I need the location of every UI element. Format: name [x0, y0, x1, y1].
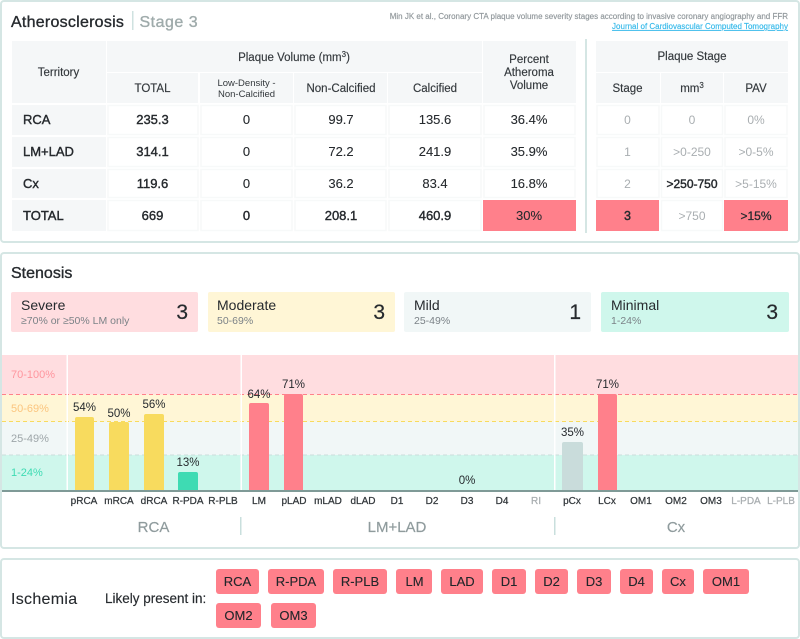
row: LM+LAD: 0 — [243, 144, 250, 159]
row: RCA — [12, 105, 575, 135]
row: RCA: 99.7 — [328, 112, 354, 127]
row: RCA: 235.3 — [136, 112, 169, 127]
row: TOTAL: 460.9 — [419, 208, 451, 223]
row: LM+LAD: 35.9% — [511, 144, 548, 159]
table: plaque volume: ) — [346, 52, 350, 64]
heading: atherosclerosis stage — [11, 11, 198, 31]
segment labels: dRCA — [141, 496, 168, 507]
card: severe: 3 — [176, 301, 188, 324]
segment labels: mLAD — [314, 496, 342, 507]
bar chart: stenosis by segment — [2, 355, 798, 536]
segment labels — [71, 496, 795, 507]
bar values: 56% — [142, 399, 166, 411]
heading: atherosclerosis stage: Stage 3 — [140, 14, 198, 31]
bar values: 64% — [247, 389, 271, 401]
segment labels: RI — [531, 496, 541, 507]
table: plaque volume: Non-Calcified — [218, 89, 275, 100]
chips: affected territories: R-PLB — [341, 574, 379, 589]
table: plaque volume: Calcified — [413, 83, 457, 95]
severity bands: 50-69% — [11, 403, 49, 415]
row: Cx: 83.4 — [422, 176, 448, 191]
table: plaque volume: Territory — [38, 67, 80, 79]
table: plaque volume: Low-Density - — [217, 78, 276, 89]
table: plaque stage: 1 — [624, 145, 631, 159]
row: Cx: 0 — [243, 176, 250, 191]
segment labels: R-PDA — [172, 496, 204, 507]
card: moderate: 3 — [373, 301, 385, 324]
row: TOTAL: 30% — [516, 208, 542, 223]
segment labels: OM2 — [665, 496, 687, 507]
segment labels: L-PDA — [731, 496, 761, 507]
bars — [75, 394, 617, 490]
table: plaque stage: 0 — [689, 113, 696, 127]
severity bands: 70-100% — [11, 369, 55, 381]
bar values: 54% — [73, 402, 96, 414]
row: LM+LAD: 241.9 — [419, 144, 451, 159]
segment labels: mRCA — [104, 496, 134, 507]
table: plaque volume: Percent — [509, 54, 550, 66]
row: TOTAL: 0 — [243, 208, 250, 223]
bar values: 13% — [176, 457, 200, 469]
citation: Min JK et al., Coronary CTA plaque volume severity stages according to invasive coronary angiography and FFR — [390, 12, 788, 21]
territory labels: LM+LAD — [368, 519, 427, 536]
row: Cx: Cx — [23, 176, 39, 191]
table: plaque stage: Plaque Stage — [657, 51, 727, 63]
territory labels — [138, 517, 686, 536]
segment labels: D4 — [496, 496, 509, 507]
severity bands: 1-24% — [11, 467, 43, 479]
row: Cx — [12, 169, 575, 198]
row: TOTAL: TOTAL — [23, 208, 64, 223]
chips: affected territories: LM — [405, 574, 424, 589]
table: plaque stage: 2 — [624, 177, 631, 191]
row: Cx: 16.8% — [511, 176, 548, 191]
row: RCA: 36.4% — [511, 112, 548, 127]
table: plaque volume: Plaque Volume (mm — [238, 52, 342, 64]
row: RCA: 0 — [243, 112, 250, 127]
table: plaque stage: 3 — [624, 209, 631, 223]
card: severe — [11, 292, 198, 332]
bar values: 35% — [561, 427, 584, 439]
segment labels: R-PLB — [208, 496, 238, 507]
card: moderate: Moderate — [217, 297, 276, 313]
chips: affected territories: D2 — [543, 574, 560, 589]
row: TOTAL: 208.1 — [325, 208, 357, 223]
table: plaque volume — [12, 41, 576, 231]
chips: affected territories: OM3 — [279, 608, 308, 623]
segment labels: LM — [252, 496, 266, 507]
table: plaque stage: >750 — [678, 209, 706, 223]
row: LM+LAD: 314.1 — [136, 144, 169, 159]
chips: affected territories: RCA — [224, 574, 252, 589]
card: severe: Severe — [21, 297, 66, 313]
row: LM+LAD: 72.2 — [328, 144, 354, 159]
heading: stenosis: Stenosis — [11, 265, 72, 282]
row: Cx: 36.2 — [328, 176, 354, 191]
table: plaque stage: >0-250 — [673, 145, 711, 159]
table: plaque volume: 3 — [342, 50, 347, 59]
chips: affected territories: Cx — [670, 574, 686, 589]
bar values: 71% — [282, 379, 305, 391]
chips: affected territories: D3 — [586, 574, 602, 589]
chips: affected territories — [216, 569, 749, 628]
table: plaque stage — [596, 41, 788, 231]
row: LM+LAD: LM+LAD — [23, 144, 74, 159]
panel: ischemia — [1, 559, 799, 638]
bar values: 0% — [459, 475, 475, 487]
row: RCA: RCA — [23, 112, 51, 127]
segment labels: OM3 — [700, 496, 722, 507]
row: Cx: 119.6 — [137, 176, 168, 191]
territory labels: Cx — [667, 519, 686, 536]
row: RCA: 135.6 — [419, 112, 451, 127]
segment labels: pLAD — [281, 496, 307, 507]
segment labels: dLAD — [350, 496, 376, 507]
table: plaque stage: >5-15% — [735, 177, 777, 191]
citation: Journal of Cardiovascular Computed Tomography — [612, 22, 788, 31]
territory labels: RCA — [138, 519, 169, 536]
segment labels: OM1 — [630, 496, 652, 507]
card: mild: Mild — [414, 297, 440, 313]
table: plaque stage: 0% — [747, 113, 765, 127]
table: plaque stage: mm — [680, 83, 699, 95]
citation — [390, 12, 788, 31]
table: plaque stage: Stage — [612, 83, 643, 95]
card: minimal: 1-24% — [611, 315, 641, 327]
bar values: 50% — [107, 408, 131, 420]
bar values: 71% — [596, 379, 619, 391]
table: plaque volume: TOTAL — [134, 83, 171, 95]
table: plaque stage: >250-750 — [666, 177, 718, 191]
row: TOTAL — [12, 200, 576, 231]
table: plaque stage: >15% — [740, 209, 772, 223]
table: plaque volume: Non-Calcified — [306, 83, 376, 95]
card: moderate: 50-69% — [217, 315, 253, 327]
segment labels: pCx — [563, 496, 581, 507]
table: plaque stage: 3 — [699, 81, 704, 90]
chips: affected territories: OM2 — [224, 608, 253, 623]
segment labels: D3 — [461, 496, 474, 507]
segment labels: pRCA — [71, 496, 98, 507]
card: mild — [404, 292, 591, 332]
chips: affected territories: D1 — [501, 574, 517, 589]
segment labels: D1 — [391, 496, 404, 507]
card: mild: 1 — [569, 301, 581, 324]
heading: atherosclerosis stage: Atherosclerosis — [11, 14, 124, 31]
card: severe: ≥70% or ≥50% LM only — [21, 315, 130, 327]
card: mild: 25-49% — [414, 315, 450, 327]
segment labels: LCx — [598, 496, 616, 507]
chips: affected territories: OM1 — [712, 574, 740, 589]
card: minimal — [601, 292, 789, 332]
row: LM+LAD — [12, 137, 575, 167]
table: plaque stage: >0-5% — [738, 145, 774, 159]
panel: atherosclerosis — [1, 1, 799, 242]
card: minimal: 3 — [766, 301, 778, 324]
severity bands: 25-49% — [11, 433, 49, 445]
card: minimal: Minimal — [611, 297, 659, 313]
heading: ischemia: Ischemia — [11, 591, 77, 608]
row: TOTAL: 669 — [142, 208, 163, 223]
label: likely present in: Likely present in: — [105, 591, 206, 606]
bar values — [73, 379, 619, 487]
table: plaque volume: Atheroma — [504, 67, 555, 79]
chips: affected territories: D4 — [628, 574, 645, 589]
chips: affected territories: LAD — [449, 574, 475, 589]
segment labels: L-PLB — [767, 496, 795, 507]
segment labels: D2 — [426, 496, 439, 507]
table: plaque volume: Volume — [510, 80, 548, 92]
severity bands — [2, 355, 798, 490]
table: plaque stage: 0 — [624, 113, 631, 127]
table: plaque stage: PAV — [745, 83, 767, 95]
chips: affected territories: R-PDA — [276, 574, 317, 589]
panel: stenosis — [1, 253, 799, 548]
card: moderate — [208, 292, 395, 332]
